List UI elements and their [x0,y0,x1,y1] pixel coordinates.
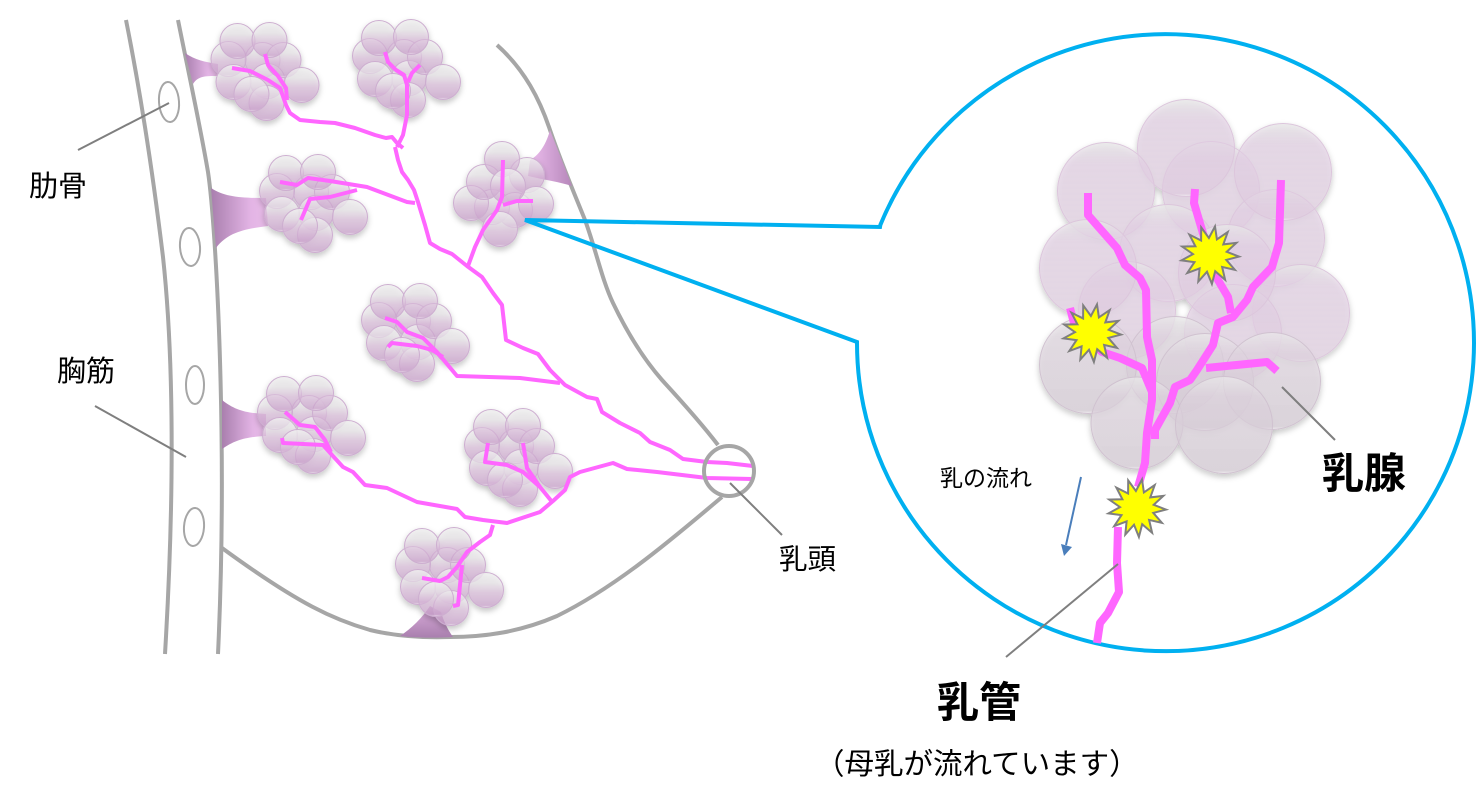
suspensory tissue [185,53,572,638]
ribs [158,81,205,547]
chest wall lines [126,20,222,654]
blockage star 3 [1108,479,1166,537]
label: pectoral muscle: 胸筋 [57,355,115,388]
blockage star 2 [1064,304,1121,362]
label: ribs: 肋骨 [29,170,87,203]
blockage star 1 [1182,226,1239,284]
enlarged ducts [1070,180,1281,643]
leader lines [78,103,782,535]
label: milk duct note: （母乳が流れています） [815,748,1139,781]
label: mammary gland: 乳腺 [1322,450,1406,497]
label: milk duct: 乳管 [937,679,1021,726]
zoom callout circle [525,34,1474,651]
milk ducts [232,52,753,606]
milk gland clusters [211,20,572,626]
callout leader lines [1006,387,1335,657]
label: nipple: 乳頭 [779,544,836,576]
arrow: milk flow [1061,477,1081,556]
enlarged milk glands [1040,100,1350,474]
label: milk flow: 乳の流れ [940,465,1032,491]
nipple circle [704,446,754,496]
breast outline [222,45,722,637]
